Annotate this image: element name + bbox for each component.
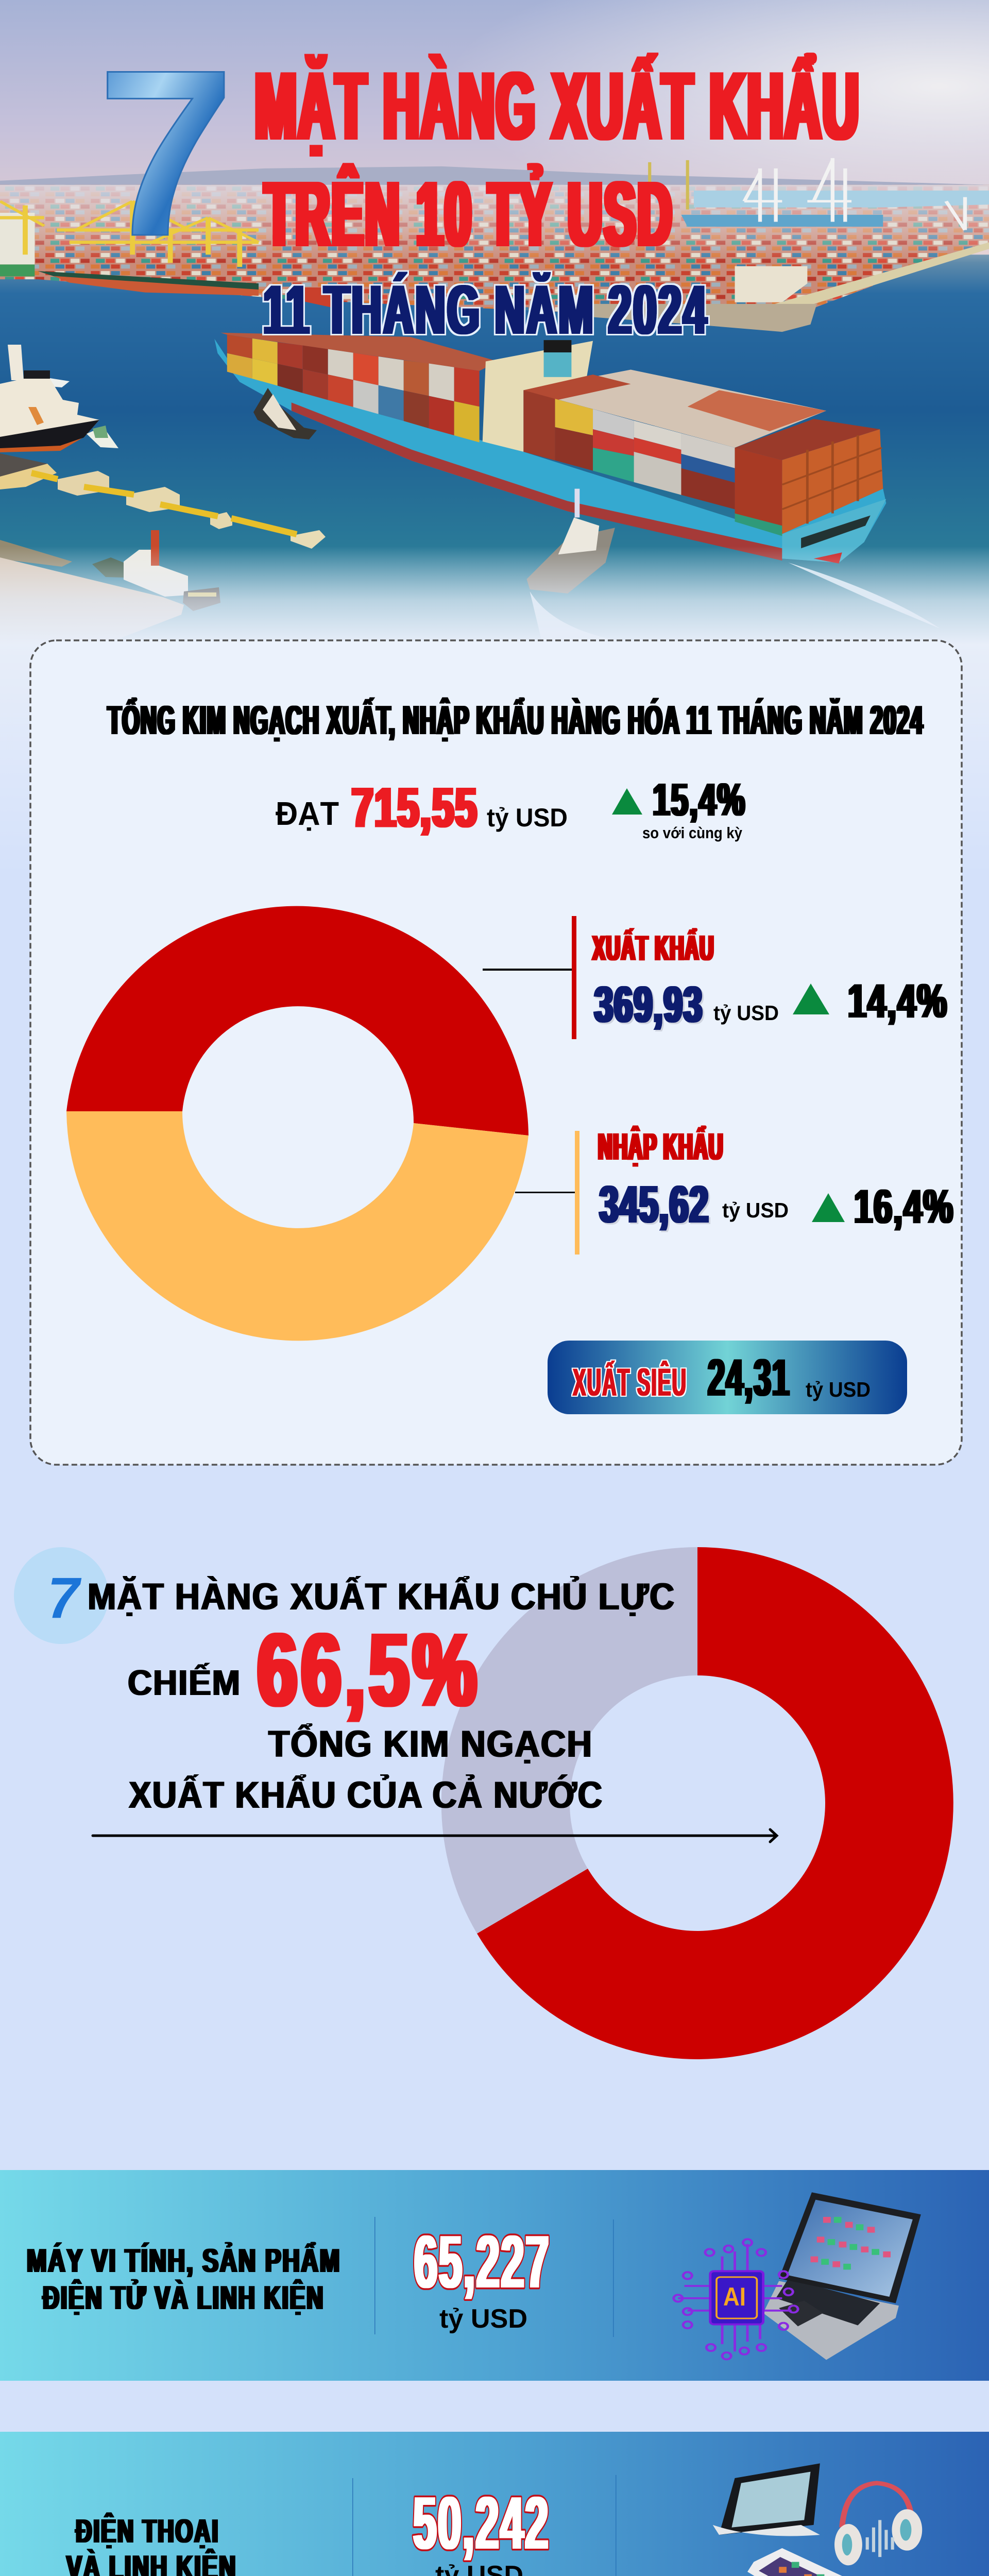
export callout: 369,93 bbox=[594, 976, 703, 1032]
unit: tỷ USD bbox=[439, 2304, 527, 2334]
value: 50,242 bbox=[413, 2481, 550, 2565]
donut chart: 66.5 percent bbox=[441, 1547, 953, 2059]
share text bbox=[88, 1576, 675, 1816]
export callout: tỷ USD bbox=[713, 1001, 779, 1025]
share text: XUẤT KHẨU CỦA CẢ NƯỚC bbox=[129, 1774, 603, 1816]
share text: 66,5% bbox=[258, 1613, 481, 1727]
big number 7: 7 bbox=[97, 21, 235, 285]
row: computers and electronics bbox=[0, 2170, 989, 2381]
total growth: 15,4% bbox=[653, 774, 746, 826]
trade surplus pill: tỷ USD bbox=[806, 1378, 871, 1401]
export callout: XUẤT KHẨU bbox=[592, 927, 714, 968]
section: seven key exports share bbox=[14, 1547, 953, 2059]
total value: 715,55 bbox=[352, 776, 478, 838]
import callout bbox=[515, 1125, 954, 1255]
label: ĐIỆN TỬ VÀ LINH KIỆN bbox=[43, 2279, 325, 2316]
number 7: 7 bbox=[47, 1566, 82, 1630]
total value: tỷ USD bbox=[487, 803, 568, 832]
donut chart: export vs import bbox=[66, 906, 528, 1341]
label bbox=[66, 2512, 237, 2576]
panel: total import-export bbox=[30, 640, 962, 1465]
chip text: AI bbox=[723, 2282, 746, 2311]
icon: laptop with AI chip bbox=[674, 2192, 921, 2360]
hero left foreground: tanker, jetty, tug, quay bbox=[0, 345, 326, 644]
total growth bbox=[612, 774, 746, 842]
title bbox=[255, 53, 860, 349]
trade surplus pill bbox=[548, 1341, 907, 1414]
total growth: so với cùng kỳ bbox=[642, 824, 743, 842]
import callout: NHẬP KHẨU bbox=[598, 1125, 724, 1168]
value: 65,227 bbox=[414, 2220, 550, 2303]
arrow bbox=[93, 1829, 777, 1842]
trade surplus pill: 24,31 bbox=[708, 1348, 790, 1407]
label bbox=[27, 2242, 341, 2316]
share text: MẶT HÀNG XUẤT KHẨU CHỦ LỰC bbox=[88, 1576, 675, 1618]
label: MÁY VI TÍNH, SẢN PHẨM bbox=[27, 2242, 341, 2279]
trade surplus pill: XUẤT SIÊU bbox=[573, 1360, 687, 1404]
total value bbox=[276, 776, 568, 838]
total value: ĐẠT bbox=[276, 795, 339, 832]
export callout: 14,4% bbox=[848, 974, 948, 1028]
share text: CHIẾM bbox=[128, 1663, 241, 1703]
import callout: 345,62 bbox=[600, 1176, 709, 1233]
row: phones and components bbox=[0, 2432, 989, 2576]
circle behind number bbox=[14, 1547, 109, 1644]
export callout bbox=[483, 916, 948, 1039]
label: ĐIỆN THOẠI bbox=[76, 2512, 219, 2550]
share text: TỔNG KIM NGẠCH bbox=[268, 1723, 593, 1765]
icon: tablet, headphones, smartphone bbox=[713, 2463, 922, 2576]
import callout: tỷ USD bbox=[722, 1198, 789, 1222]
hero photo: container ship at port bbox=[0, 0, 989, 876]
